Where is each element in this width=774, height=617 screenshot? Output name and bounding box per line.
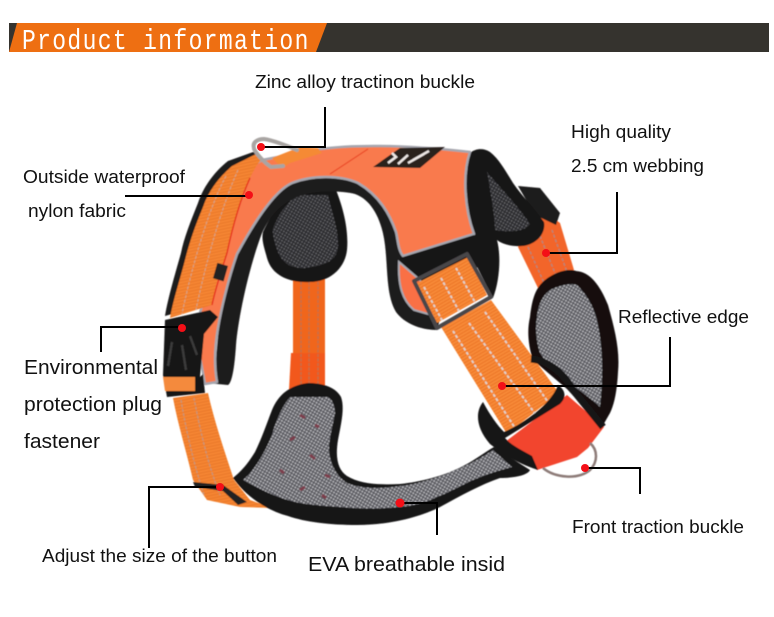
callout: nylon fabric bbox=[23, 167, 253, 221]
callout: plug fastener: protection plug bbox=[24, 394, 162, 416]
callout: EVA bbox=[308, 498, 505, 576]
callout: nylon fabric: nylon fabric bbox=[28, 201, 126, 221]
callout: zinc buckle bbox=[255, 72, 475, 151]
red pocket bbox=[505, 395, 604, 470]
callout: webbing: 2.5 cm webbing bbox=[571, 156, 704, 176]
callout: reflective edge: Reflective edge bbox=[618, 307, 749, 327]
callout: webbing bbox=[542, 122, 704, 257]
black cuff bbox=[478, 385, 564, 470]
callout: webbing: High quality bbox=[571, 122, 671, 142]
pad trim bbox=[531, 359, 603, 427]
small side clip bbox=[213, 263, 228, 281]
callout: plug fastener: fastener bbox=[24, 431, 100, 453]
front metal ring bbox=[543, 443, 596, 477]
callout: front buckle: Front traction buckle bbox=[572, 517, 744, 537]
center mesh pad bbox=[262, 190, 347, 282]
logo patch bbox=[373, 147, 445, 168]
callout: front buckle bbox=[572, 464, 744, 537]
bottom mesh pad bbox=[233, 383, 530, 525]
left long webbing bbox=[165, 151, 262, 318]
callout: nylon fabric: Outside waterproof bbox=[23, 167, 186, 187]
plug buckle bbox=[163, 310, 218, 397]
front strap lower bbox=[441, 300, 559, 434]
black tab bbox=[518, 186, 560, 225]
slider buckle bbox=[414, 254, 491, 328]
callout: zinc buckle: Zinc alloy tractinon buckle bbox=[255, 72, 475, 92]
vest body bbox=[195, 146, 484, 384]
callout: size button bbox=[42, 483, 277, 566]
bottom slider bbox=[193, 482, 247, 505]
harness product photo bbox=[163, 139, 618, 525]
title: Product information bbox=[22, 25, 310, 58]
lower left webbing bbox=[173, 393, 272, 508]
callout: plug fastener: Environmental bbox=[24, 357, 158, 379]
black inner trim bbox=[207, 172, 445, 385]
right upper webbing bbox=[518, 208, 574, 288]
metal D-ring top bbox=[254, 139, 297, 167]
header banner bbox=[9, 23, 769, 58]
right mesh pad bbox=[528, 270, 618, 427]
top webbing loop bbox=[272, 147, 322, 168]
callout: plug fastener bbox=[24, 324, 186, 453]
callout: EVA: EVA breathable insid bbox=[308, 554, 505, 576]
center vertical strap bbox=[289, 278, 325, 390]
vest right collar band bbox=[458, 149, 544, 298]
callout: size button: Adjust the size of the button bbox=[42, 546, 277, 566]
callout: reflective edge bbox=[498, 307, 749, 390]
